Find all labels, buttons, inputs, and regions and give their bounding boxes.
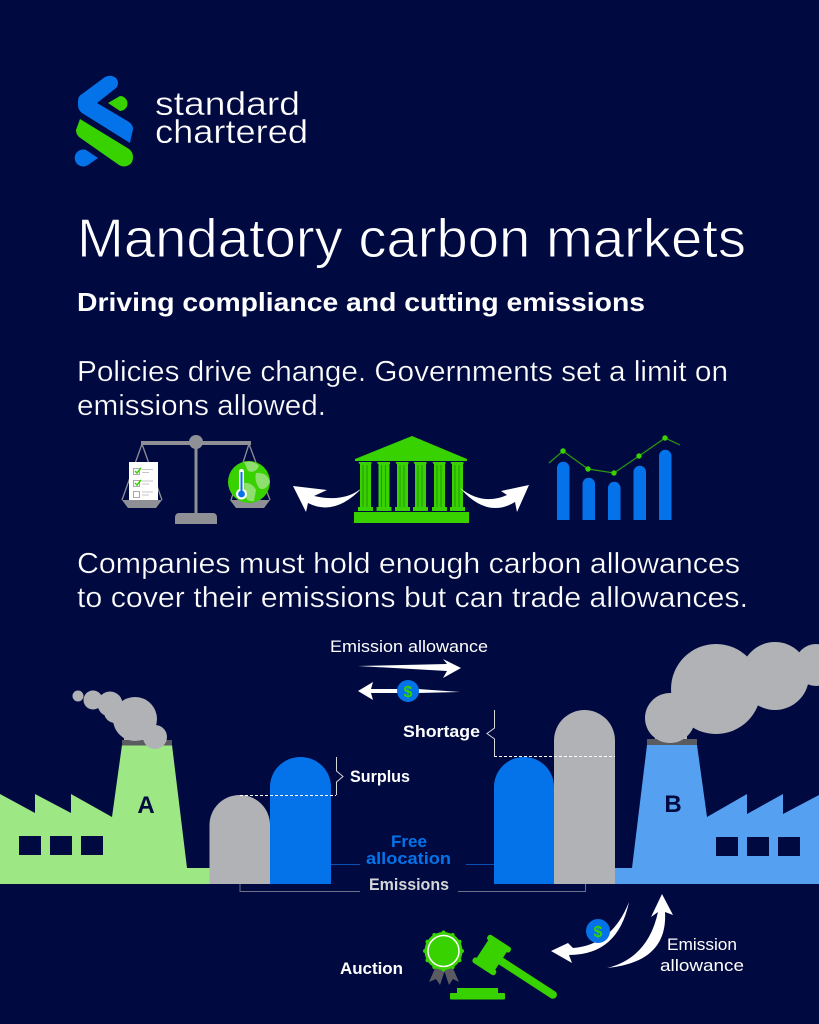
factory A: A xyxy=(137,792,155,819)
bars: company B allocation and emissions xyxy=(494,710,615,884)
icon: gavel xyxy=(450,934,562,1009)
logo wordmark: chartered xyxy=(155,113,308,150)
icon: rosette xyxy=(423,930,464,985)
label: emission allowance from auction: allowance xyxy=(660,957,744,975)
chart: bars with trend line xyxy=(549,435,680,520)
label: emission allowance: Emission allowance xyxy=(330,637,488,656)
text block: policies: emissions allowed. xyxy=(77,390,326,422)
subtitle: Driving compliance and cutting emissions xyxy=(77,287,645,317)
logo wordmark: standard xyxy=(155,85,300,122)
arrow: bank to chart xyxy=(460,485,529,512)
label: auction: Auction xyxy=(340,960,403,978)
label: emissions: Emissions xyxy=(369,876,449,894)
arrow: allowance right xyxy=(358,659,461,678)
label: shortage: Shortage xyxy=(403,723,480,741)
logo: Standard Chartered xyxy=(75,76,308,167)
arrow: payment to auction with coin xyxy=(551,902,629,963)
label: surplus: Surplus xyxy=(350,768,410,786)
arrow: allowance to factory B xyxy=(607,894,673,968)
icon: logo mark xyxy=(75,76,133,167)
arrow: payment left with coin: $ xyxy=(404,684,413,701)
label: free allocation: allocation xyxy=(366,850,451,868)
text block: companies: to cover their emissions but can trade allowances. xyxy=(77,582,748,614)
bars xyxy=(557,450,672,520)
smoke: factory B xyxy=(645,642,819,743)
leader lines xyxy=(240,864,586,892)
label: free allocation xyxy=(366,833,451,868)
shortage marker xyxy=(487,710,615,757)
trend line xyxy=(549,435,680,476)
text block: companies xyxy=(77,548,748,614)
icon: balance scale with checklist and globe xyxy=(122,435,270,524)
label: free allocation: Free xyxy=(391,833,427,851)
scale frame xyxy=(122,435,270,524)
bars: company A emissions and allocation xyxy=(210,757,331,884)
smoke: factory A xyxy=(72,690,167,749)
icon: government bank building xyxy=(354,436,469,523)
factory A xyxy=(0,740,210,884)
surplus marker xyxy=(240,757,343,796)
label: emission allowance from auction xyxy=(660,936,744,975)
label: emission allowance from auction: Emission xyxy=(667,936,737,954)
factory B xyxy=(615,739,819,884)
arrow: payment left with coin xyxy=(358,680,460,702)
text block: policies xyxy=(77,356,728,422)
arrow: bank to scale xyxy=(293,486,363,512)
checklist xyxy=(129,462,158,500)
text block: policies: Policies drive change. Governments set a limit on xyxy=(77,356,728,388)
title: Mandatory carbon markets xyxy=(77,207,746,269)
factory B: B xyxy=(664,791,682,818)
windows xyxy=(716,837,800,856)
text block: companies: Companies must hold enough carbon allowances xyxy=(77,548,740,580)
globe with thermometer xyxy=(228,461,270,503)
arrow: payment to auction with coin: $ xyxy=(594,924,603,941)
windows xyxy=(19,836,103,855)
logo wordmark xyxy=(155,85,308,150)
columns xyxy=(358,462,465,511)
